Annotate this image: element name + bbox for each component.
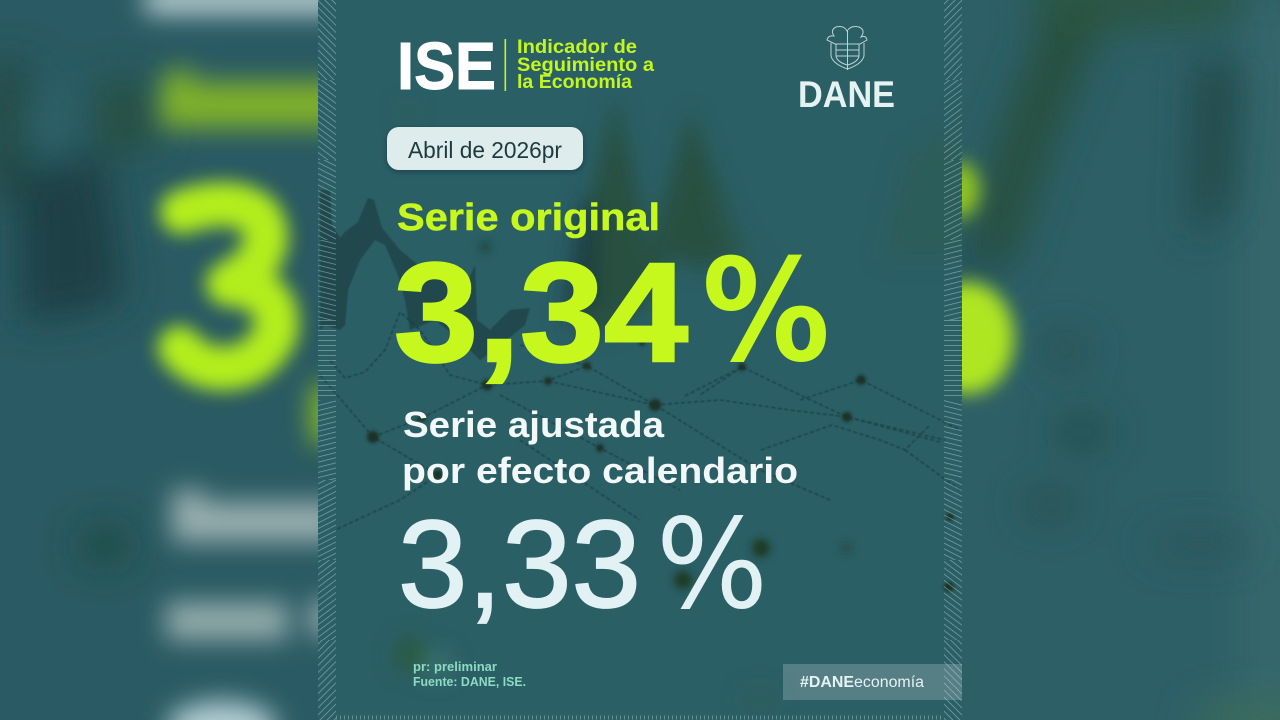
footnote: source: pr: preliminar: [413, 660, 497, 674]
hashtag tag: [783, 664, 962, 700]
blurred network nodes: [479, 241, 852, 589]
dashed network lines: [320, 312, 960, 530]
logo: DANE wordmark: DANE: [798, 74, 895, 115]
footnote: source: Fuente: DANE, ISE.: [413, 675, 526, 689]
panel: blurred right background: [962, 0, 1280, 720]
subtitle: Indicador de Seguimiento a la Economía: Indicador de: [517, 37, 637, 58]
subtitle: Indicador de Seguimiento a la Economía: [517, 37, 654, 93]
heading: Serie ajustada por efecto calendario: por efecto calendario: [402, 450, 798, 491]
blurred numeral shape: [180, 204, 277, 368]
main value: 3,34 %: [394, 229, 830, 394]
logo: DANE coat of arms: [827, 26, 867, 70]
sharp chart silhouette: [320, 190, 530, 360]
footnote: source: [413, 660, 526, 689]
heading: Serie ajustada por efecto calendario: Serie ajustada: [403, 404, 665, 445]
heading: Serie original: Serie original: [397, 197, 660, 239]
panel: central card background: [320, 106, 961, 680]
subtitle: Indicador de Seguimiento a la Economía: la Economía: [517, 72, 632, 93]
network nodes: [367, 340, 954, 592]
secondary value: 3,33 %: [398, 493, 768, 637]
heading: ISE wordmark: ISE: [397, 29, 496, 104]
subtitle: Indicador de Seguimiento a la Economía: Seguimiento a: [517, 55, 654, 76]
hashtag tag: #DANEeconomía: [800, 674, 924, 691]
secondary value: 3,33 %: 3,33: [398, 496, 641, 634]
hatched border: left: [318, 0, 336, 720]
hatched border: right: [944, 0, 962, 720]
blurred percent fragments: [962, 152, 1027, 406]
date pill: [387, 127, 583, 170]
main value: 3,34 %: %: [702, 229, 830, 394]
heading: Serie ajustada por efecto calendario: [402, 404, 798, 491]
divider: title rule: [504, 39, 506, 91]
secondary value: 3,33 %: %: [656, 493, 768, 637]
hatched border: bottom: [336, 716, 944, 720]
panel: blurred left background: [0, 0, 350, 720]
blurred chart peaks: [394, 95, 965, 714]
main value: 3,34 %: 3,34: [394, 233, 688, 391]
date pill: Abril de 2026pr: [408, 137, 562, 163]
